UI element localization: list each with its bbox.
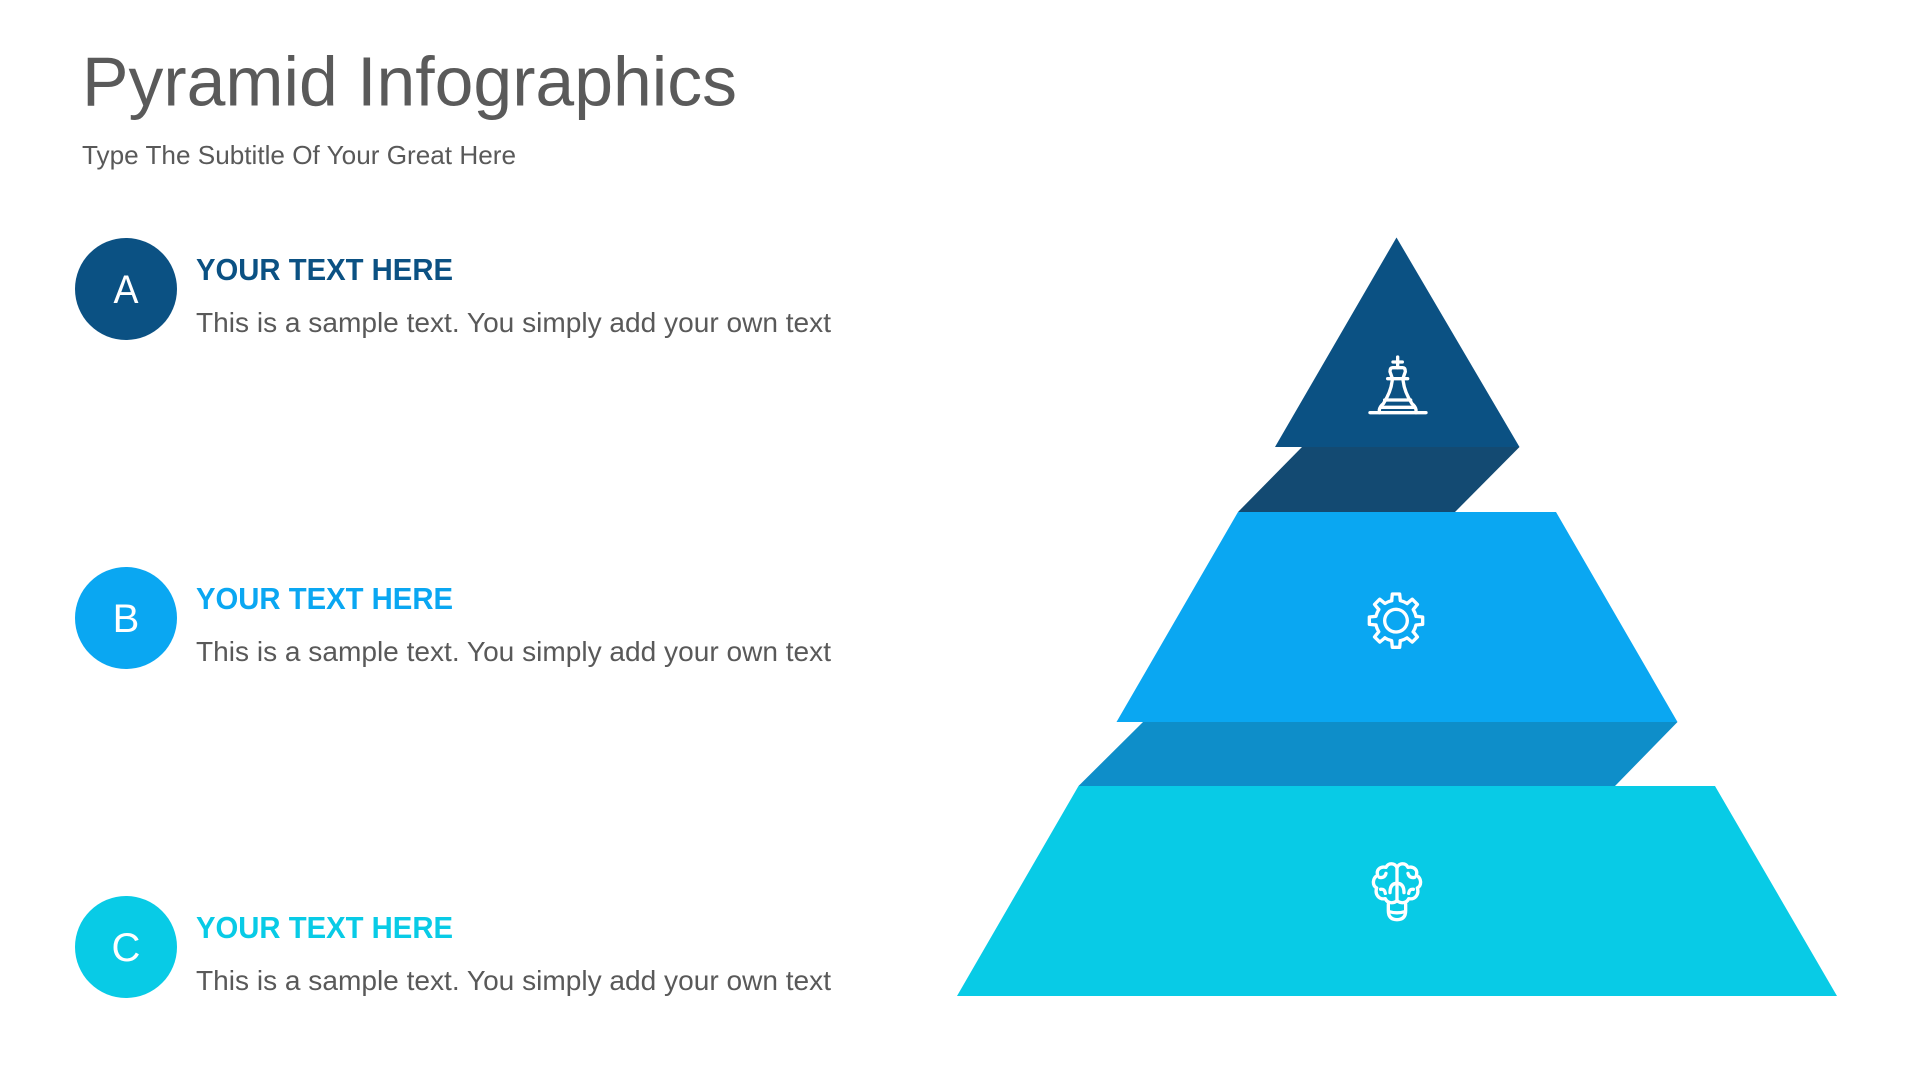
heading B: YOUR TEXT HERE	[196, 581, 453, 616]
pyramid tier: middle	[1116, 512, 1678, 722]
pyramid tier: top	[1275, 238, 1520, 447]
badge A	[75, 238, 177, 340]
shadow band: top tier	[1238, 447, 1520, 512]
heading A: YOUR TEXT HERE	[196, 252, 453, 287]
shadow band: middle tier	[1078, 722, 1678, 786]
badge A: A	[114, 268, 139, 312]
panel: item C	[75, 896, 831, 998]
body text B: This is a sample text. You simply add your own text	[196, 636, 831, 667]
pyramid chart	[957, 238, 1837, 996]
body text C: This is a sample text. You simply add your own text	[196, 965, 831, 996]
title: Pyramid Infographics	[82, 42, 737, 120]
body text A: This is a sample text. You simply add your own text	[196, 307, 831, 338]
icon: chess king	[1370, 357, 1426, 413]
panel: item A	[75, 238, 831, 340]
badge C	[75, 896, 177, 998]
badge B	[75, 567, 177, 669]
badge B: B	[113, 597, 139, 641]
pyramid tier: bottom	[957, 786, 1837, 996]
icon: brain light bulb	[1373, 864, 1421, 920]
heading C: YOUR TEXT HERE	[196, 910, 453, 945]
badge C: C	[112, 926, 140, 970]
icon: gear	[1369, 594, 1423, 647]
subtitle: Type The Subtitle Of Your Great Here	[82, 140, 516, 170]
panel: item B	[75, 567, 831, 669]
